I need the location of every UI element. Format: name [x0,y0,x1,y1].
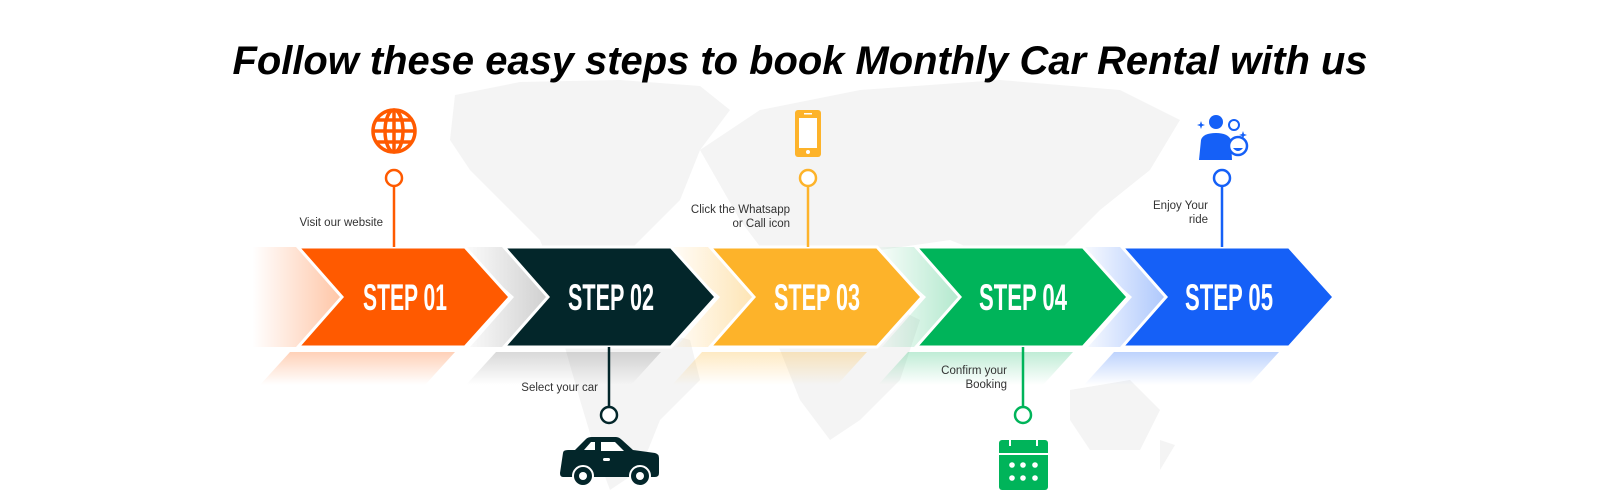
step 02 chevron [504,247,716,347]
labels: ride [1189,214,1208,226]
labels: Select your car [521,382,598,394]
icon: happy person [1197,115,1247,160]
labels: or Call icon [732,218,790,230]
labels: Booking [965,379,1007,391]
step 05 chevron: STEP 05 [1185,277,1273,318]
labels: Visit our website [299,217,383,229]
labels: Enjoy Your [1153,200,1208,212]
labels [299,200,1208,394]
icon: car [560,437,659,486]
step 03 chevron [710,247,922,347]
connector: step 02 [601,347,617,423]
connector: step 05 [1214,170,1230,247]
step 02 chevron: STEP 02 [568,277,654,318]
step 05 chevron [1122,247,1334,347]
step 01 chevron [298,247,510,347]
step 04 chevron: STEP 04 [979,277,1067,318]
step 04 chevron [916,247,1128,347]
icon: calendar [999,438,1048,490]
title: Follow these easy steps to book Monthly Car Rental with us [232,39,1368,83]
ghost chevrons and reflections [252,247,1279,385]
icon: phone [795,110,821,157]
labels: Confirm your [941,365,1007,377]
connector: step 03 [800,170,816,247]
step 03 chevron: STEP 03 [774,277,860,318]
labels: Click the Whatsapp [691,204,790,216]
connector: step 04 [1015,347,1031,423]
world map background [450,80,1180,490]
connector: step 01 [386,170,402,247]
icon: globe [373,110,415,152]
step 01 chevron: STEP 01 [363,277,447,318]
